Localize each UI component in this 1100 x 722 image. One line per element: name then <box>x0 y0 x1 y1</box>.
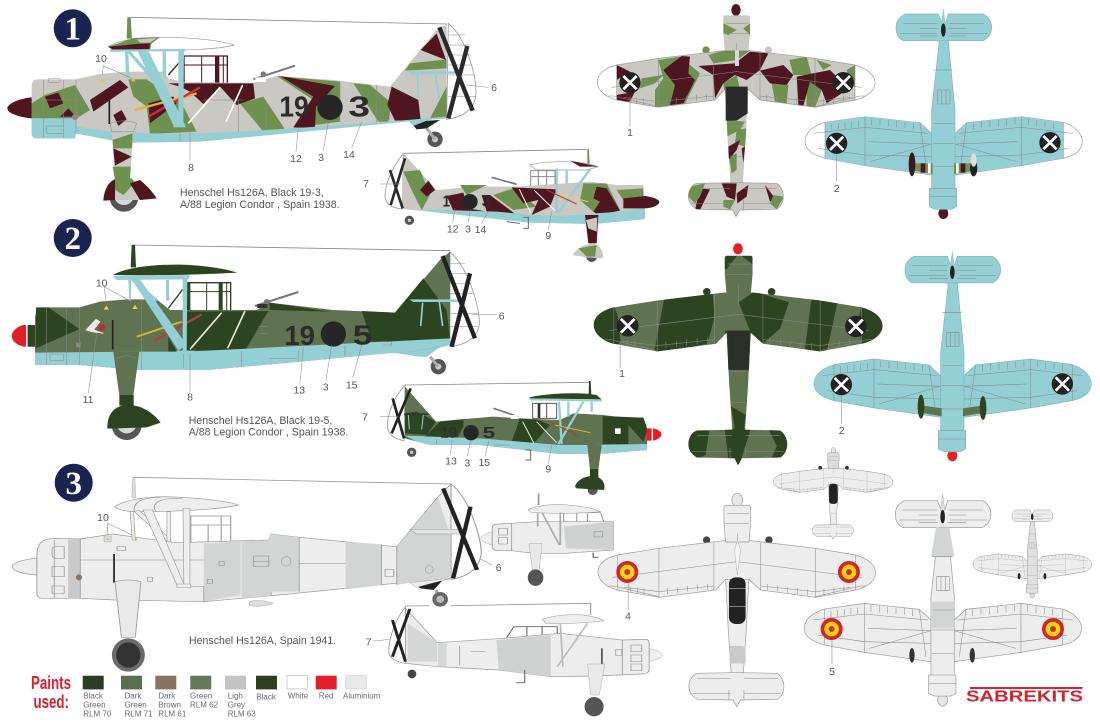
callout numbers aircraft 1: 12 <box>290 153 302 165</box>
callout numbers aircraft 2: 10 <box>96 277 108 289</box>
caption aircraft 2: A/88 Legion Condor , Spain 1938. <box>189 427 348 439</box>
side view: aircraft 1: 3 <box>348 92 370 124</box>
callout numbers small aircraft 1: 14 <box>475 224 486 236</box>
callout numbers small aircraft 2 <box>362 412 551 476</box>
side view: aircraft 2: 19 <box>284 320 315 351</box>
callout numbers aircraft 3: 7 <box>366 637 372 649</box>
underside view: aircraft 1 <box>805 7 1082 219</box>
callout numbers plan views aircraft 1 <box>627 127 840 195</box>
callout numbers aircraft 2: 6 <box>499 310 505 322</box>
panel: scheme 1 Legion Condor 19-3 <box>7 4 1082 262</box>
badge 1: 1 <box>64 12 81 48</box>
legend title: Paints <box>31 673 71 693</box>
swatch: Black Green RLM 70: RLM 70 <box>83 710 112 719</box>
callout numbers aircraft 2: 11 <box>83 394 94 406</box>
badge 3: 3 <box>65 466 82 502</box>
callout numbers plan views aircraft 1: 2 <box>834 183 840 195</box>
legend title: used: <box>34 692 69 712</box>
callout numbers small aircraft 2: 13 <box>445 456 457 468</box>
callout numbers plan views aircraft 2 <box>619 368 845 437</box>
swatch: Dark Green RLM 71 <box>121 676 153 718</box>
swatch: Green RLM 62: Green <box>190 691 212 700</box>
callout numbers small aircraft 1 <box>363 178 551 242</box>
callout numbers aircraft 1: 6 <box>491 82 497 94</box>
swatch: Dark Brown RLM 61: RLM 61 <box>158 709 187 718</box>
caption aircraft 1: A/88 Legion Condor , Spain 1938. <box>180 199 340 211</box>
small side view: aircraft 3 left side <box>373 603 662 716</box>
callout numbers small aircraft 1: 12 <box>447 223 459 235</box>
top view: aircraft 2 <box>590 243 884 467</box>
badge 2 <box>54 219 92 257</box>
callout numbers aircraft 2: 13 <box>293 384 305 396</box>
callout numbers small aircraft 2: 7 <box>362 412 368 424</box>
swatch: Light Grey RLM 63: RLM 63 <box>228 710 256 719</box>
swatch: White: White <box>288 691 309 700</box>
callout numbers aircraft 1 <box>95 53 497 174</box>
callout numbers small aircraft 2: 9 <box>545 464 551 476</box>
badge 1 <box>54 9 92 48</box>
small side view: aircraft 2 left side: 5 <box>483 425 496 442</box>
small side view: aircraft 3 right side <box>480 493 614 586</box>
side view: aircraft 2 <box>12 245 497 440</box>
callout numbers aircraft 3: 6 <box>496 562 502 574</box>
swatch: Black <box>256 676 277 701</box>
side view: aircraft 1 <box>7 17 488 212</box>
callout numbers plan views aircraft 3: 4 <box>625 611 631 623</box>
swatch: Black Green RLM 70 <box>83 676 112 719</box>
swatch: Aluminium: Aluminium <box>343 692 381 701</box>
swatch: Red: Red <box>319 691 333 700</box>
swatch: White <box>287 676 309 700</box>
underside view: aircraft 3 <box>804 494 1082 706</box>
small side view: aircraft 1 right side <box>380 149 659 262</box>
swatch: Light Grey RLM 63: Grey <box>228 701 245 710</box>
caption aircraft 3: Henschel Hs126A, Spain 1941. <box>189 635 336 647</box>
swatch: Light Grey RLM 63 <box>225 676 256 719</box>
swatch: Black Green RLM 70: Black <box>83 692 103 701</box>
swatch: Dark Brown RLM 61: Brown <box>158 700 181 709</box>
callout numbers aircraft 1: 14 <box>343 149 355 161</box>
callout numbers small aircraft 1: 3 <box>465 223 471 235</box>
swatch: Dark Brown RLM 61 <box>155 676 187 718</box>
small side view: aircraft 2 left side: 19 <box>440 425 457 442</box>
callout numbers aircraft 1: 3 <box>318 152 324 164</box>
tiny top view: aircraft 3 <box>773 448 893 539</box>
callout numbers small aircraft 2: 3 <box>464 457 470 469</box>
caption aircraft 2: Henschel Hs126A, Black 19-5, <box>189 415 332 427</box>
callout numbers aircraft 2: 3 <box>323 382 329 394</box>
callout numbers aircraft 2 <box>83 277 505 406</box>
top view: aircraft 3 <box>598 493 876 707</box>
callout numbers aircraft 1: 10 <box>95 53 107 65</box>
tiny underside view: aircraft 3 <box>973 510 1092 598</box>
swatch: Light Grey RLM 63: Ligh <box>228 692 243 701</box>
callout numbers aircraft 3: 10 <box>97 512 109 524</box>
swatch: Green RLM 62 <box>190 676 219 709</box>
callout numbers plan views aircraft 2: 1 <box>619 368 625 380</box>
callout numbers small aircraft 2: 15 <box>478 457 490 469</box>
callout numbers plan views aircraft 3: 5 <box>829 666 835 678</box>
top view: aircraft 1 <box>593 4 878 217</box>
callout numbers aircraft 2: 15 <box>346 379 358 391</box>
side view: aircraft 1: 19 <box>279 92 309 124</box>
swatch: Red <box>316 676 337 700</box>
swatch: Black Green RLM 70: Green <box>83 701 106 710</box>
swatch: Dark Green RLM 71: RLM 71 <box>124 709 153 718</box>
caption aircraft 1: Henschel Hs126A, Black 19-3, <box>180 187 324 199</box>
callout numbers small aircraft 1: 9 <box>545 230 551 242</box>
badge 2: 2 <box>64 221 81 257</box>
swatch: Dark Brown RLM 61: Dark <box>158 691 175 700</box>
swatch: Black: Black <box>256 692 277 701</box>
badge 3 <box>55 464 93 502</box>
side view: aircraft 2: 5 <box>353 319 373 350</box>
panel: scheme 2 Legion Condor 19-5 <box>12 219 1091 495</box>
underside view: aircraft 2 <box>814 250 1091 461</box>
callout numbers aircraft 3 <box>97 512 502 649</box>
legend: paints used <box>31 673 381 719</box>
small side view: aircraft 1 right side: 3 <box>482 194 491 211</box>
swatch: Dark Green RLM 71: Dark <box>124 691 141 700</box>
callout numbers plan views aircraft 3 <box>625 611 835 678</box>
swatch: Aluminium <box>343 676 381 701</box>
small side view: aircraft 2 left side <box>380 381 662 495</box>
logo: Sabrekits: SABREKITS <box>966 688 1083 706</box>
panel: scheme 3 Spain 1941 <box>12 448 1092 716</box>
callout numbers small aircraft 1: 7 <box>363 178 369 190</box>
legend title <box>31 673 71 712</box>
small side view: aircraft 1 right side: 1 <box>443 194 450 211</box>
callout numbers plan views aircraft 2: 2 <box>839 425 845 437</box>
callout numbers aircraft 2: 8 <box>187 392 193 404</box>
callout numbers plan views aircraft 1: 1 <box>627 127 633 139</box>
side view: aircraft 3 <box>12 477 492 672</box>
swatch: Dark Green RLM 71: Green <box>124 700 147 709</box>
swatch: Green RLM 62: RLM 62 <box>190 700 219 709</box>
callout numbers aircraft 1: 8 <box>188 162 194 174</box>
